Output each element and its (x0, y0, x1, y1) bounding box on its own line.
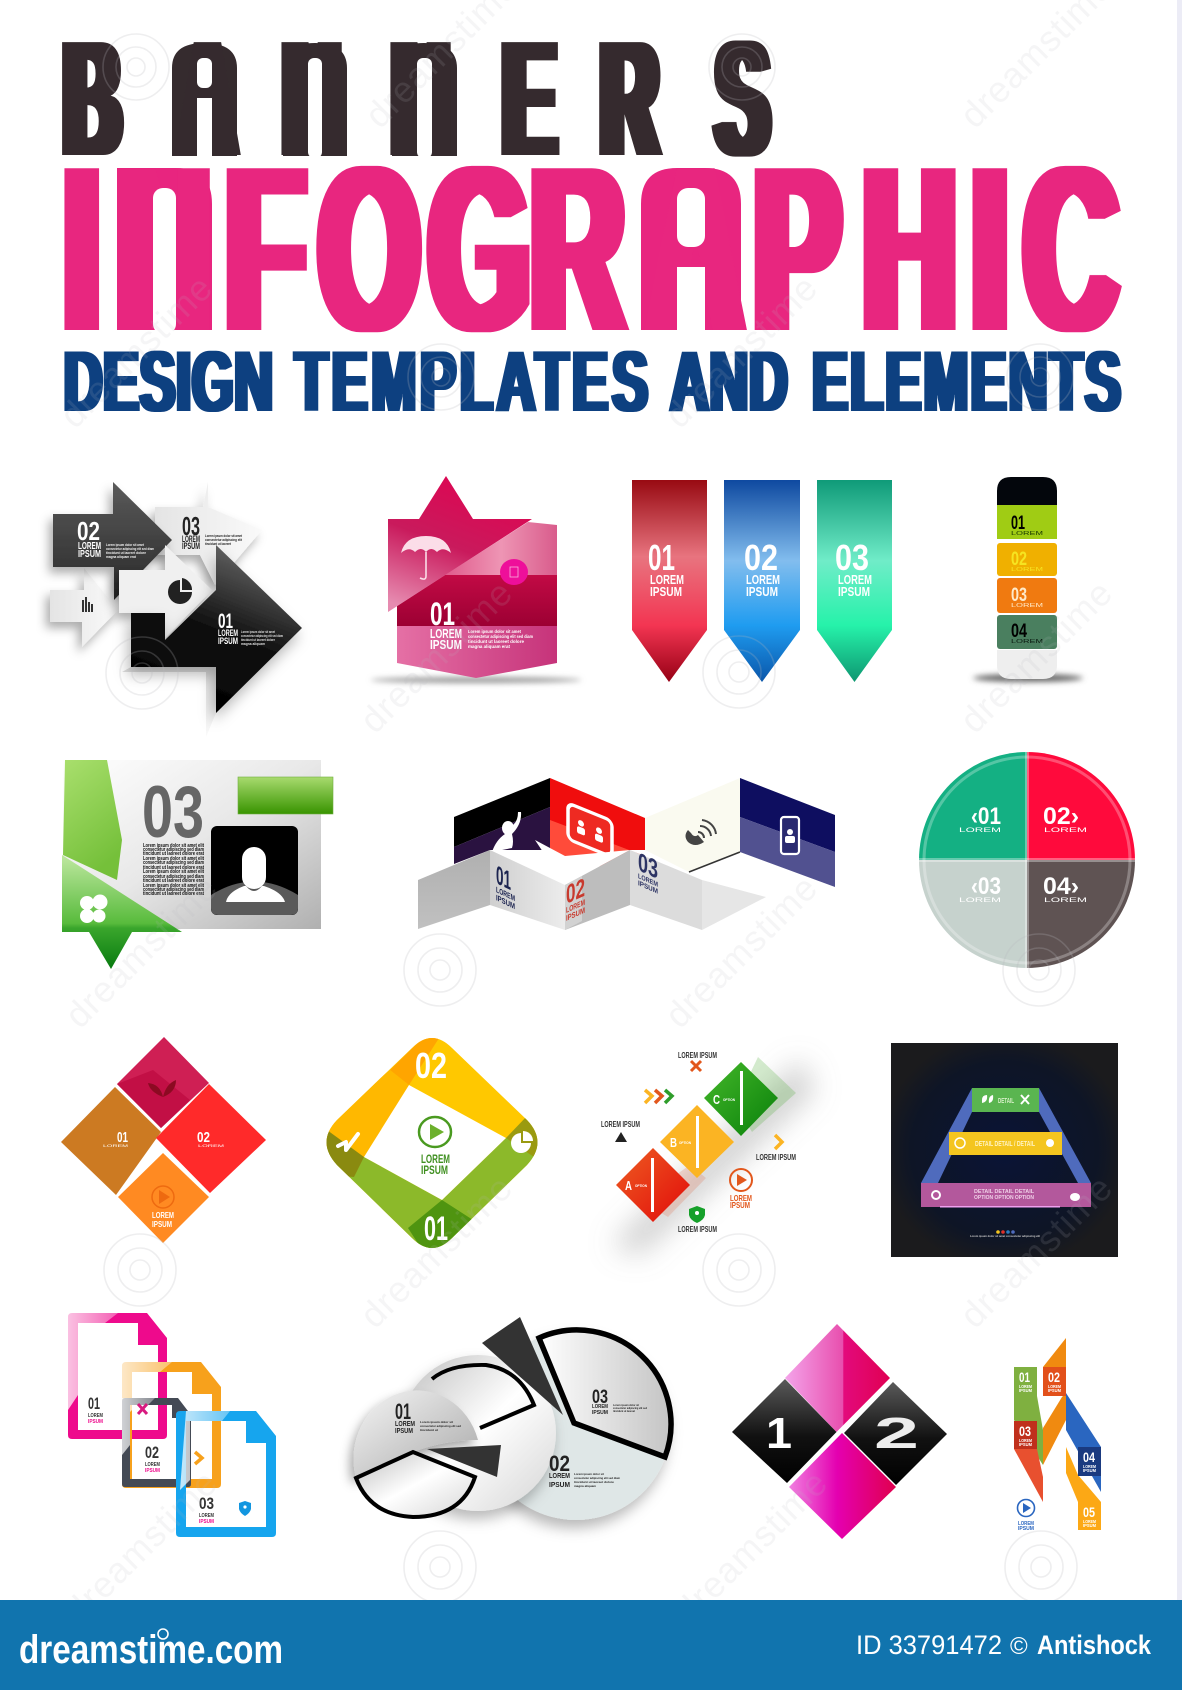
box 02 (1043, 1367, 1066, 1396)
arrow 02: LOREM (78, 541, 101, 552)
text 01: consectetur adipiscing elit sed (420, 1424, 461, 1428)
panel: ribbon steps (1014, 1338, 1101, 1532)
dark wedge lower (427, 1445, 501, 1477)
play ring with caption: IPSUM (730, 1200, 750, 1210)
banner shadow (371, 677, 581, 683)
centre caption (421, 1152, 450, 1177)
pink document (68, 1313, 167, 1439)
pill bottom (997, 650, 1057, 679)
quadrant 02 (1027, 752, 1135, 860)
triple chevrons (645, 1090, 672, 1103)
ribbon 01: IPSUM (650, 584, 682, 599)
fold panel left (418, 850, 490, 929)
body text: tincidunt ut laoreet dolore erat (143, 865, 204, 871)
fold panel 02: 02 (566, 872, 585, 910)
arrow 03: IPSUM (182, 541, 200, 551)
panel: dark square pyramid (891, 1043, 1118, 1257)
panel: pink and black diamond 1 2 (732, 1324, 947, 1539)
watermark text: dreamstime (657, 267, 826, 436)
box 05: IPSUM (1083, 1523, 1096, 1528)
body text: tincidunt ut laoreet dolore erat (143, 851, 204, 857)
colour dots and caption: Lorem ipsum dolor sit amet consectetur adipiscing elit (970, 1234, 1040, 1238)
ribbon 01 (632, 480, 707, 682)
sector 03: consectetur adipiscing elit sed (613, 1406, 647, 1410)
magenta circle badge (500, 559, 528, 585)
sector 03: LOREM (592, 1404, 608, 1410)
footer logo: dreamstime.com (19, 1628, 283, 1672)
ribbon 02 (724, 480, 800, 682)
segment 03 (997, 578, 1057, 613)
icon: umbrella (401, 536, 451, 579)
orange document (122, 1362, 221, 1488)
segment 04 (997, 615, 1057, 649)
text 02 (549, 1451, 620, 1489)
arrow 01: 01 (218, 610, 233, 633)
ribbon 01: 01 (648, 537, 675, 578)
banner number and text: tincidunt ut laoreet dolore (468, 639, 524, 644)
small arrow with bars (50, 568, 118, 647)
top label with cross: LOREM IPSUM (678, 1051, 717, 1060)
sector 03: tincidunt ut laoreet (613, 1409, 635, 1413)
option tile A: OPTION (635, 1184, 647, 1188)
green button bar (238, 777, 333, 814)
option tile B (660, 1105, 734, 1178)
option tile B: OPTION (679, 1141, 691, 1145)
top label with cross (678, 1051, 717, 1071)
box 01: LOREM (1019, 1384, 1032, 1389)
banner number and text: 01 (430, 596, 455, 632)
fold panel 01: LOREM (496, 884, 515, 903)
segment 01: LOREM (1011, 531, 1043, 537)
black panel with person icon (454, 778, 550, 864)
play ring with caption (1018, 1500, 1034, 1532)
yellow bar (949, 1132, 1062, 1155)
watermark text: dreamstime (352, 572, 521, 741)
fold panel 03: 03 (638, 846, 658, 885)
left tile 01: LOREM (103, 1143, 128, 1148)
left black facet with number 1 (732, 1379, 836, 1483)
blue frame (921, 1088, 1091, 1183)
play ring with caption (730, 1169, 752, 1210)
right black facet with number 2: 2 (874, 1409, 919, 1458)
arrow 03 (155, 482, 262, 585)
panel: stepped options (601, 1051, 815, 1255)
number 03: 03 (142, 772, 204, 853)
pink bar (921, 1183, 1091, 1208)
left tile 01: 01 (117, 1129, 128, 1146)
arrow with pie icon (119, 545, 212, 638)
text 02: magna aliquam (574, 1484, 596, 1488)
watermark text: dreamstime (657, 867, 826, 1036)
box 04: 04 (1083, 1449, 1095, 1465)
panel: pink banner (371, 476, 581, 683)
panel: green profile card (62, 760, 333, 969)
right tile 02 (156, 1084, 266, 1193)
footer image id: ID 33791472 (856, 1630, 1002, 1660)
lower band (397, 626, 557, 678)
icon: pie (511, 1131, 533, 1153)
box 02: LOREM (1048, 1384, 1061, 1389)
quadrant 02: 02› (1043, 803, 1079, 830)
segment 04: 04 (1011, 621, 1027, 642)
yellow bar: DETAIL DETAIL / DETAIL (975, 1141, 1036, 1148)
text 01: 01 (395, 1399, 411, 1424)
arrow 03: LOREM (182, 534, 200, 544)
text 01: tincidunt ut (420, 1428, 438, 1432)
body text: Lorem ipsum dolor sit amet elit (143, 883, 204, 889)
arrow 02: consectetur adipiscing elit sed diam (106, 547, 154, 551)
orange document: 02 (145, 1443, 159, 1462)
box 03: LOREM (1019, 1438, 1032, 1443)
text 01: Lorem ipsum dolor sit (420, 1420, 453, 1424)
segment 02: LOREM (1011, 567, 1043, 573)
option tile C (704, 1062, 778, 1136)
watermark text: dreamstime (52, 267, 221, 436)
middle grey circle (400, 1355, 556, 1511)
panel: rounded green and yellow diamond (326, 1038, 538, 1248)
banner number and text: magna aliquam erat (468, 644, 510, 649)
box 02: 02 (1048, 1369, 1060, 1385)
diamond bands (326, 1038, 538, 1248)
fold panel 02 (565, 850, 630, 930)
green bar: DETAIL (998, 1098, 1014, 1105)
ribbon 03 (817, 480, 892, 682)
centre caption: IPSUM (421, 1163, 448, 1177)
watermark text: dreamstime (952, 1167, 1121, 1336)
large pale circle 02 (481, 1330, 671, 1520)
arrow 01: magna aliquam (241, 642, 265, 646)
blue document (176, 1411, 276, 1537)
ribbon 02: LOREM (746, 572, 780, 587)
left label with triangle: LOREM IPSUM (601, 1120, 640, 1129)
box 04: LOREM (1083, 1464, 1096, 1469)
text 02: 02 (549, 1451, 570, 1476)
segment 02: 02 (1011, 549, 1027, 570)
subtitle: ELEMENTS (812, 334, 1123, 430)
fold panel 02: IPSUM (566, 905, 585, 923)
icon: play ring (419, 1117, 451, 1147)
box 03: IPSUM (1019, 1442, 1032, 1447)
fold panel 02: LOREM (566, 897, 585, 915)
body text: tincidunt ut laoreet dolore erat (143, 891, 204, 897)
segment 02 (997, 543, 1057, 576)
panel: folded isometric banner (418, 778, 835, 930)
shield with label: LOREM IPSUM (678, 1225, 717, 1234)
banner number and text: consectetur adipiscing elit sed diam (468, 634, 533, 639)
colour dots and caption (970, 1230, 1040, 1238)
subtitle: TEMPLATES (295, 334, 652, 430)
banner number and text: Lorem ipsum dolor sit amet (468, 629, 521, 634)
title: infographic: INFOGRAPHIC (64, 118, 1117, 381)
left black facet with number 1: 1 (766, 1409, 792, 1458)
box 04: IPSUM (1083, 1468, 1096, 1473)
watermark text: dreamstime (57, 867, 226, 1036)
title: banners: BANNERS (64, 8, 769, 191)
arrow 02: IPSUM (78, 549, 101, 560)
quadrant 02: LOREM (1044, 827, 1087, 834)
fold panel 03: LOREM (638, 871, 658, 889)
arrow 03: consectetur adipiscing elit (205, 538, 243, 542)
panel: black and white arrows (50, 482, 302, 737)
quadrant 04: 04› (1043, 873, 1079, 900)
blue band (1066, 1393, 1101, 1492)
arrow 02: magna aliquam erat (106, 555, 137, 559)
orange band (1043, 1338, 1066, 1465)
left tile 01 (61, 1087, 161, 1195)
navy panel with mobile icon (740, 778, 835, 887)
number 01: 01 (424, 1210, 448, 1248)
panel: three ribbons (632, 480, 892, 682)
green band (1014, 1396, 1043, 1465)
arrow 02: tincidunt ut laoreet dolore (106, 551, 146, 555)
star shape (388, 476, 532, 612)
text 02: IPSUM (549, 1482, 570, 1489)
pink document: LOREM (88, 1413, 103, 1419)
banner number and text (430, 596, 533, 652)
watermark text: dreamstime (57, 1462, 226, 1631)
icon: person portrait (211, 826, 298, 915)
segment 01 (997, 505, 1057, 539)
pink bar: OPTION OPTION OPTION (974, 1195, 1034, 1201)
body text: Lorem ipsum dolor sit amet elit (143, 869, 204, 875)
text 02: tincidunt ut laoreet dolore (574, 1480, 614, 1484)
white centre (364, 1085, 506, 1200)
dark red band (397, 575, 557, 626)
white interior floor (535, 840, 630, 885)
banner number and text: IPSUM (430, 637, 462, 652)
subtitle: DESIGN (64, 334, 274, 430)
number 02: 02 (415, 1045, 447, 1086)
box 01: 01 (1019, 1369, 1030, 1385)
pink document: 01 (88, 1394, 100, 1413)
panel: four quadrant circle (919, 752, 1135, 968)
text 02: LOREM (549, 1473, 570, 1480)
segment 04: LOREM (1011, 639, 1043, 645)
box 05: LOREM (1083, 1519, 1096, 1524)
option tile C: OPTION (723, 1098, 735, 1102)
fold panel 03: IPSUM (638, 878, 658, 896)
text 01: IPSUM (395, 1428, 413, 1435)
quadrant 03: ‹03 (971, 873, 1001, 900)
lower grey reflection (122, 667, 216, 737)
blue document: 03 (199, 1494, 214, 1513)
text 02: consectetur adipiscing elit sed diam (574, 1476, 620, 1480)
floor shadow (702, 880, 766, 930)
ribbon 01: LOREM (650, 572, 684, 587)
play ring with caption: LOREM (1018, 1521, 1034, 1527)
ribbon 03: IPSUM (838, 584, 870, 599)
right tile 02: LOREM (198, 1143, 224, 1148)
bottom pink facet (789, 1433, 896, 1539)
footer image id: © (1010, 1633, 1028, 1660)
box 02: IPSUM (1048, 1388, 1061, 1393)
right black facet with number 2 (844, 1382, 947, 1485)
box 03 (1014, 1421, 1037, 1449)
pill shadow (973, 674, 1083, 682)
quadrant 03 (919, 860, 1027, 968)
right label with chevron (756, 1135, 796, 1162)
box 01: IPSUM (1019, 1388, 1032, 1393)
bottom tile: LOREM (152, 1211, 174, 1220)
sector 03 (539, 1330, 671, 1457)
option tile A (616, 1148, 690, 1222)
watermark spirals (103, 34, 1077, 1603)
arrow 01 (131, 545, 302, 713)
ghost tiles (640, 1057, 796, 1217)
body text (143, 843, 204, 897)
yellow band (1066, 1447, 1101, 1502)
red panel with monitor icon (550, 778, 645, 872)
segment 03: 03 (1011, 585, 1027, 606)
arrow 01: Lorem ipsum dolor sit amet (241, 630, 276, 634)
circle 01 top segment (353, 1390, 478, 1478)
panel: grey pie segments (353, 1317, 671, 1520)
body text: Lorem ipsum dolor sit amet elit (143, 843, 204, 849)
ribbon 03: 03 (835, 537, 869, 578)
green speech pointer (62, 855, 182, 969)
arrow 03: tincidunt ut laoreet (205, 542, 232, 546)
dark background (891, 1043, 1118, 1257)
arrow 02: 02 (77, 516, 100, 546)
sector 03: 03 (592, 1387, 608, 1408)
option tile C: C (713, 1092, 720, 1107)
right label with chevron: LOREM IPSUM (756, 1153, 796, 1162)
dark document (122, 1398, 191, 1487)
fold panel 03 (630, 846, 702, 930)
top pink facet (785, 1324, 890, 1432)
body text: tincidunt ut laoreet dolore erat (143, 878, 204, 884)
arrow 03: 03 (182, 511, 200, 541)
blue document: LOREM (199, 1513, 214, 1519)
icon: line graph (338, 1134, 358, 1150)
body text: consectetur adipiscing sed diam (143, 860, 204, 866)
box 05 (1078, 1502, 1101, 1530)
banner number and text: LOREM (430, 626, 462, 641)
quadrant 01: LOREM (959, 827, 1001, 834)
outlined sector upper (432, 1365, 534, 1428)
watermark text: dreamstime (667, 1462, 836, 1631)
body text: consectetur adipiscing sed diam (143, 887, 204, 893)
panel: overlapping document frames (68, 1313, 276, 1537)
arrow 02 (53, 482, 172, 600)
arrow 01: consectetur adipiscing elit sed diam (241, 634, 283, 638)
quadrant 01 (919, 752, 1027, 860)
right tile 02: 02 (197, 1129, 210, 1146)
orange document: LOREM (145, 1462, 160, 1468)
text 01 (395, 1399, 461, 1435)
ribbon 02: 02 (744, 537, 778, 578)
watermark text: dreamstime (952, 572, 1121, 741)
box 05: 05 (1083, 1504, 1095, 1520)
ribbon 02: IPSUM (746, 584, 778, 599)
arrow 03: Lorem ipsum dolor sit amet (205, 534, 243, 538)
arrow 01: IPSUM (218, 636, 238, 646)
play ring with caption: IPSUM (1018, 1526, 1034, 1532)
subtitle: AND (670, 334, 789, 430)
dark wedge top (482, 1317, 563, 1415)
card background (63, 760, 321, 929)
option tile B: B (670, 1135, 677, 1150)
top tile with leaf (117, 1037, 209, 1128)
blue document: IPSUM (199, 1519, 214, 1525)
quadrant 01: ‹01 (971, 803, 1001, 830)
fold panel 01: 01 (496, 859, 511, 896)
box 04 (1078, 1447, 1101, 1476)
sector 03: IPSUM (592, 1410, 608, 1416)
cream panel with phone icon (645, 778, 740, 872)
arrow 01: tincidunt ut laoreet dolore (241, 638, 275, 642)
text 02: Lorem ipsum dolor sit (574, 1472, 604, 1476)
shield with label (678, 1206, 717, 1234)
panel: vertical pill (973, 477, 1083, 682)
footer image id (856, 1630, 1152, 1660)
green bar (972, 1088, 1039, 1112)
bottom tile: IPSUM (152, 1220, 172, 1229)
soft shadow (612, 1060, 815, 1255)
subtitle (64, 334, 1123, 430)
text 01: LOREM (395, 1421, 415, 1428)
box 03: 03 (1019, 1423, 1031, 1439)
centre caption: LOREM (421, 1152, 450, 1166)
footer image id: Antishock (1037, 1630, 1152, 1660)
watermark text: dreamstime (352, 1167, 521, 1336)
option tile A: A (625, 1178, 632, 1193)
fold panel 01: IPSUM (496, 892, 515, 911)
arrow 02: Lorem ipsum dolor sit amet (106, 543, 145, 547)
green folded strip (63, 760, 122, 880)
body text: consectetur adipiscing sed diam (143, 874, 204, 880)
play ring with caption: LOREM (730, 1193, 752, 1203)
quadrant 04 (1027, 860, 1135, 968)
pink document: IPSUM (88, 1419, 103, 1425)
segment 01: 01 (1011, 513, 1025, 534)
sector 03: Lorem ipsum dolor sit (613, 1403, 639, 1407)
segment 03: LOREM (1011, 603, 1043, 609)
pill top (997, 477, 1057, 505)
box 01 (1014, 1367, 1037, 1396)
panel: four-part square diamond (61, 1037, 266, 1243)
quadrant 03: LOREM (959, 897, 1001, 904)
body text: consectetur adipiscing sed diam (143, 847, 204, 853)
pink bar: DETAIL DETAIL DETAIL (974, 1189, 1034, 1195)
left label with triangle (601, 1120, 640, 1142)
fold panel 01 (490, 850, 565, 930)
quadrant 04: LOREM (1044, 897, 1087, 904)
bottom tile (118, 1153, 209, 1243)
footer bar (0, 1600, 1182, 1690)
ribbon 03: LOREM (838, 572, 872, 587)
outlined sector lower (356, 1452, 475, 1517)
red-orange band (1014, 1449, 1043, 1502)
right panel (445, 522, 557, 575)
arrow 01: LOREM (218, 628, 238, 638)
body text: Lorem ipsum dolor sit amet elit (143, 856, 204, 862)
orange document: IPSUM (145, 1468, 160, 1474)
